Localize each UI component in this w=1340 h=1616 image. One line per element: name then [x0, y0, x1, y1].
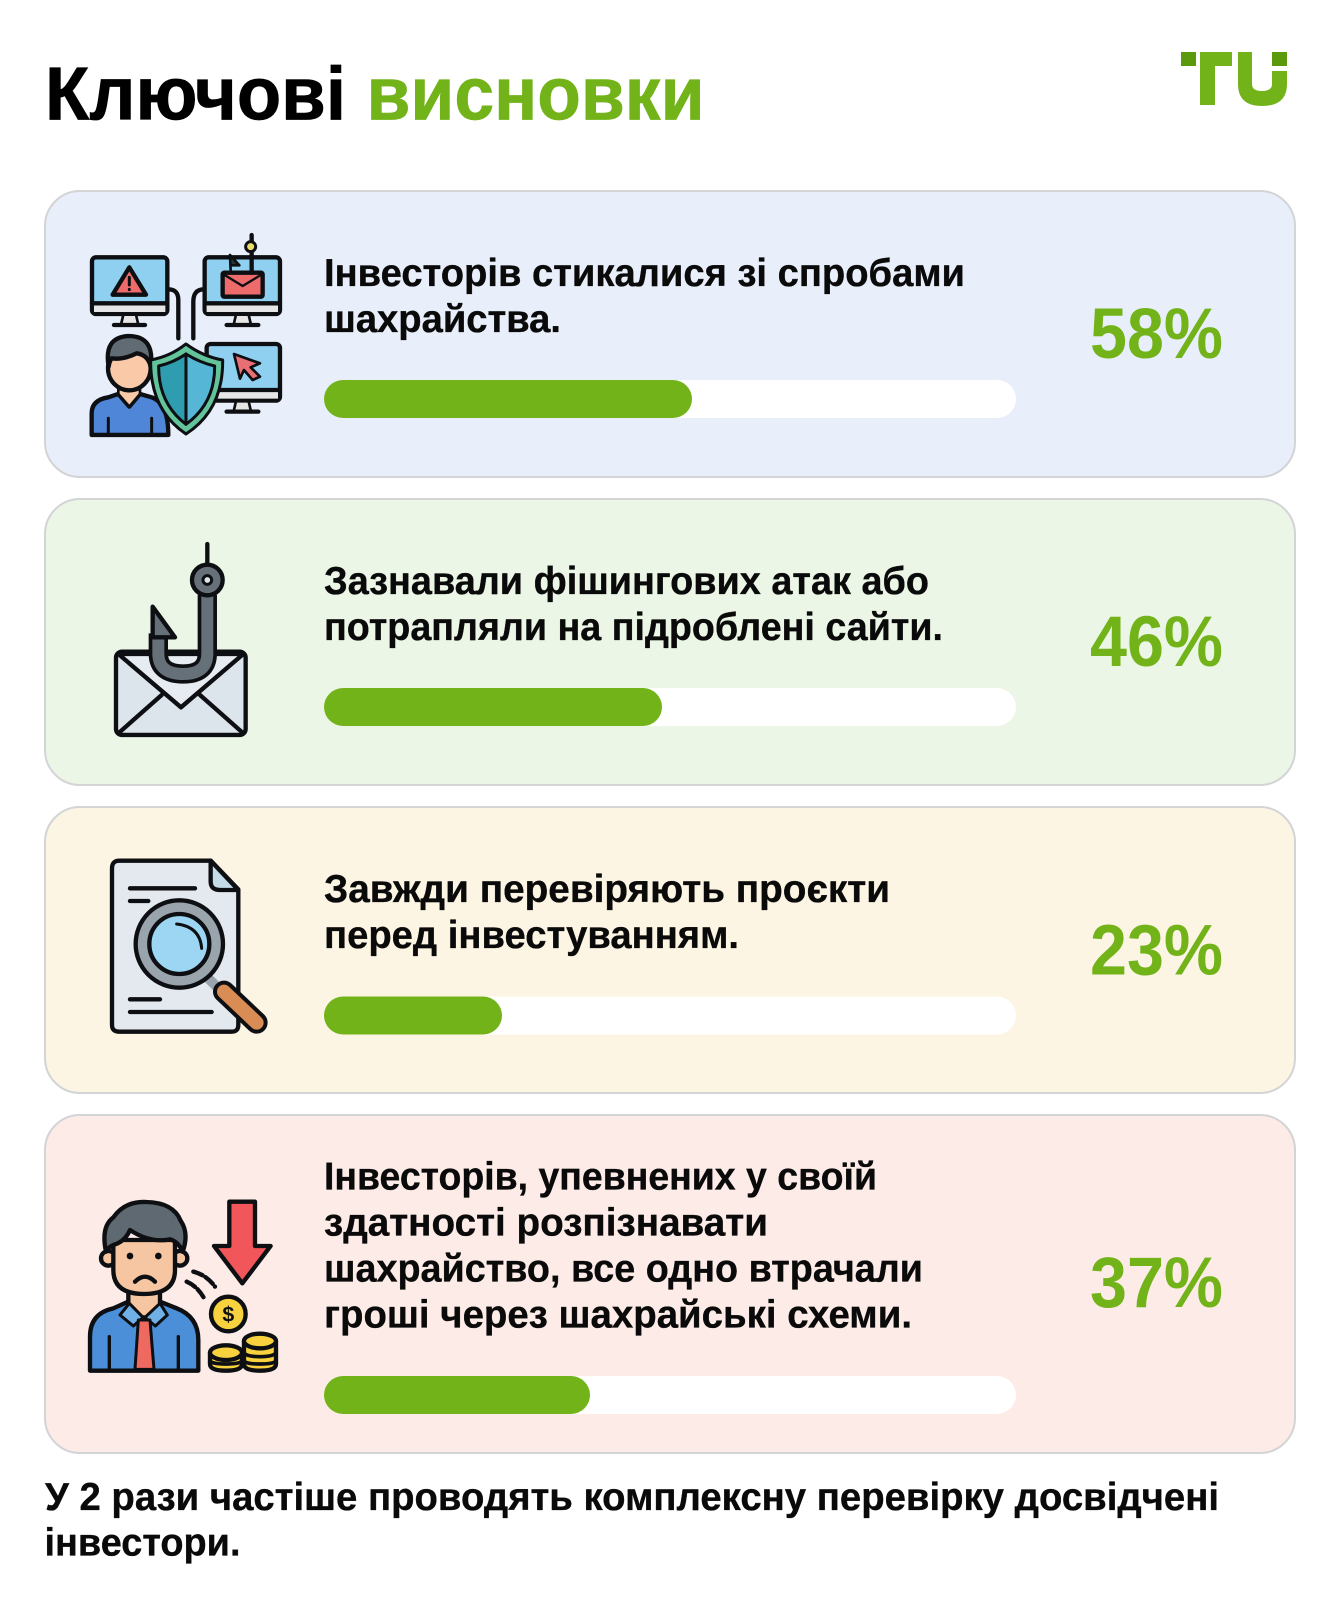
text: project checks: Завжди перевіряють проєкти — [324, 868, 890, 911]
progress bar 58% — [324, 380, 1016, 418]
value 23%: 23% — [1090, 912, 1223, 990]
text: phishing — [324, 560, 943, 649]
progress bar 46% — [324, 688, 1016, 726]
title — [45, 52, 704, 136]
icon: sad investor losing money — [90, 1202, 276, 1371]
logo — [1181, 52, 1287, 106]
footer note — [44, 1476, 1219, 1564]
text: attempted fraud: шахрайства. — [324, 298, 561, 341]
icon: sad investor losing money: $ — [222, 1302, 234, 1326]
icon: network security — [92, 235, 280, 435]
icon: document with magnifier — [112, 861, 257, 1032]
text: losses despite confidence — [324, 1156, 923, 1336]
value 46%: 46% — [1090, 603, 1223, 682]
panel: losses despite confidence — [45, 1115, 1295, 1453]
footer note: У 2 рази частіше проводять комплексну перевірку досвідчені — [45, 1476, 1219, 1519]
progress bar 23% — [324, 996, 1016, 1034]
text: losses despite confidence: здатності розпізнавати — [324, 1202, 768, 1244]
value 37%: 37% — [1090, 1244, 1223, 1323]
text: losses despite confidence: гроші через шахрайські схеми. — [324, 1294, 912, 1336]
progress bar 37% — [324, 1376, 1016, 1414]
icon: envelope with hook — [116, 544, 246, 735]
text: phishing: Зазнавали фішингових атак або — [324, 560, 929, 603]
text: phishing: потрапляли на підроблені сайти. — [324, 606, 943, 649]
text: attempted fraud — [324, 252, 965, 341]
footer note: інвестори. — [44, 1522, 240, 1564]
panel: phishing — [45, 499, 1295, 785]
text: losses despite confidence: шахрайство, все одно втрачали — [324, 1248, 923, 1290]
title: Ключові — [45, 52, 346, 136]
title: висновки — [366, 52, 704, 136]
panel: project checks — [45, 807, 1295, 1093]
text: project checks: перед інвестуванням. — [324, 914, 739, 957]
text: losses despite confidence: Інвесторів, упевнених у своїй — [324, 1156, 877, 1198]
text: project checks — [324, 868, 890, 957]
panel: attempted fraud — [45, 191, 1295, 477]
text: attempted fraud: Інвесторів стикалися зі спробами — [324, 252, 965, 295]
value 58%: 58% — [1090, 295, 1223, 374]
